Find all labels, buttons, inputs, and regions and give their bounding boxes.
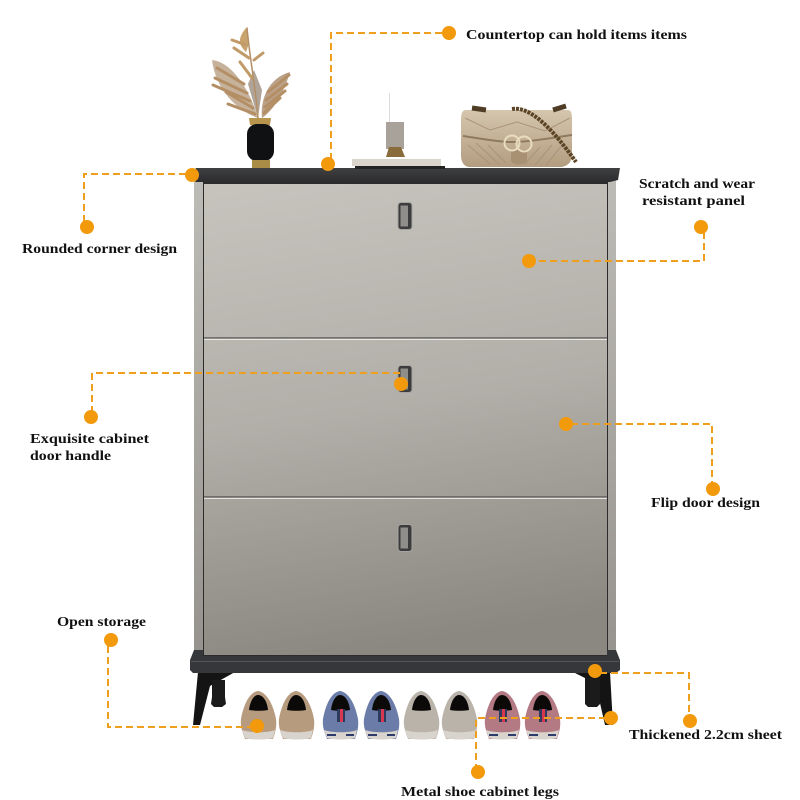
callout: open storage: Open storage bbox=[57, 615, 146, 630]
callout: scratch resistant panel: resistant panel bbox=[642, 194, 745, 209]
door 1 bbox=[204, 184, 607, 338]
door 2 bbox=[204, 340, 607, 497]
callout: metal legs bbox=[401, 711, 618, 800]
blue shoes bbox=[323, 691, 399, 740]
callout: flip door: Flip door design bbox=[651, 496, 760, 511]
cabinet body bbox=[194, 180, 616, 652]
callout: scratch resistant panel: Scratch and wear bbox=[639, 177, 755, 192]
callout: countertop: Countertop can hold items items bbox=[466, 28, 688, 43]
countertop bbox=[190, 168, 620, 182]
handle 1 bbox=[398, 202, 412, 230]
candle on books bbox=[352, 93, 445, 169]
callout: door handle bbox=[30, 373, 408, 464]
callout: metal legs: Metal shoe cabinet legs bbox=[401, 785, 560, 800]
handle 2 bbox=[398, 366, 412, 392]
beige shoes bbox=[241, 691, 314, 740]
plinth bbox=[190, 650, 620, 673]
callout: countertop bbox=[321, 26, 688, 171]
cabinet bbox=[190, 168, 620, 725]
callout: rounded corner bbox=[22, 168, 199, 257]
callout: thickened sheet: Thickened 2.2cm sheet bbox=[629, 728, 782, 743]
vase with dried plant bbox=[212, 28, 290, 168]
callout: flip door bbox=[559, 417, 760, 511]
grey shoes bbox=[404, 691, 477, 740]
pink shoes bbox=[485, 691, 560, 740]
callout: thickened sheet bbox=[588, 664, 782, 743]
callout: door handle: Exquisite cabinet bbox=[30, 432, 149, 447]
callout: rounded corner: Rounded corner design bbox=[22, 242, 177, 257]
callout: door handle: door handle bbox=[30, 449, 111, 464]
shoes bbox=[241, 691, 560, 740]
handbag bbox=[461, 106, 576, 167]
cabinet legs bbox=[193, 672, 613, 725]
handle 3 bbox=[398, 524, 412, 552]
callout: open storage bbox=[57, 615, 264, 733]
door 3 bbox=[204, 499, 607, 655]
callout: scratch resistant panel bbox=[522, 177, 755, 268]
